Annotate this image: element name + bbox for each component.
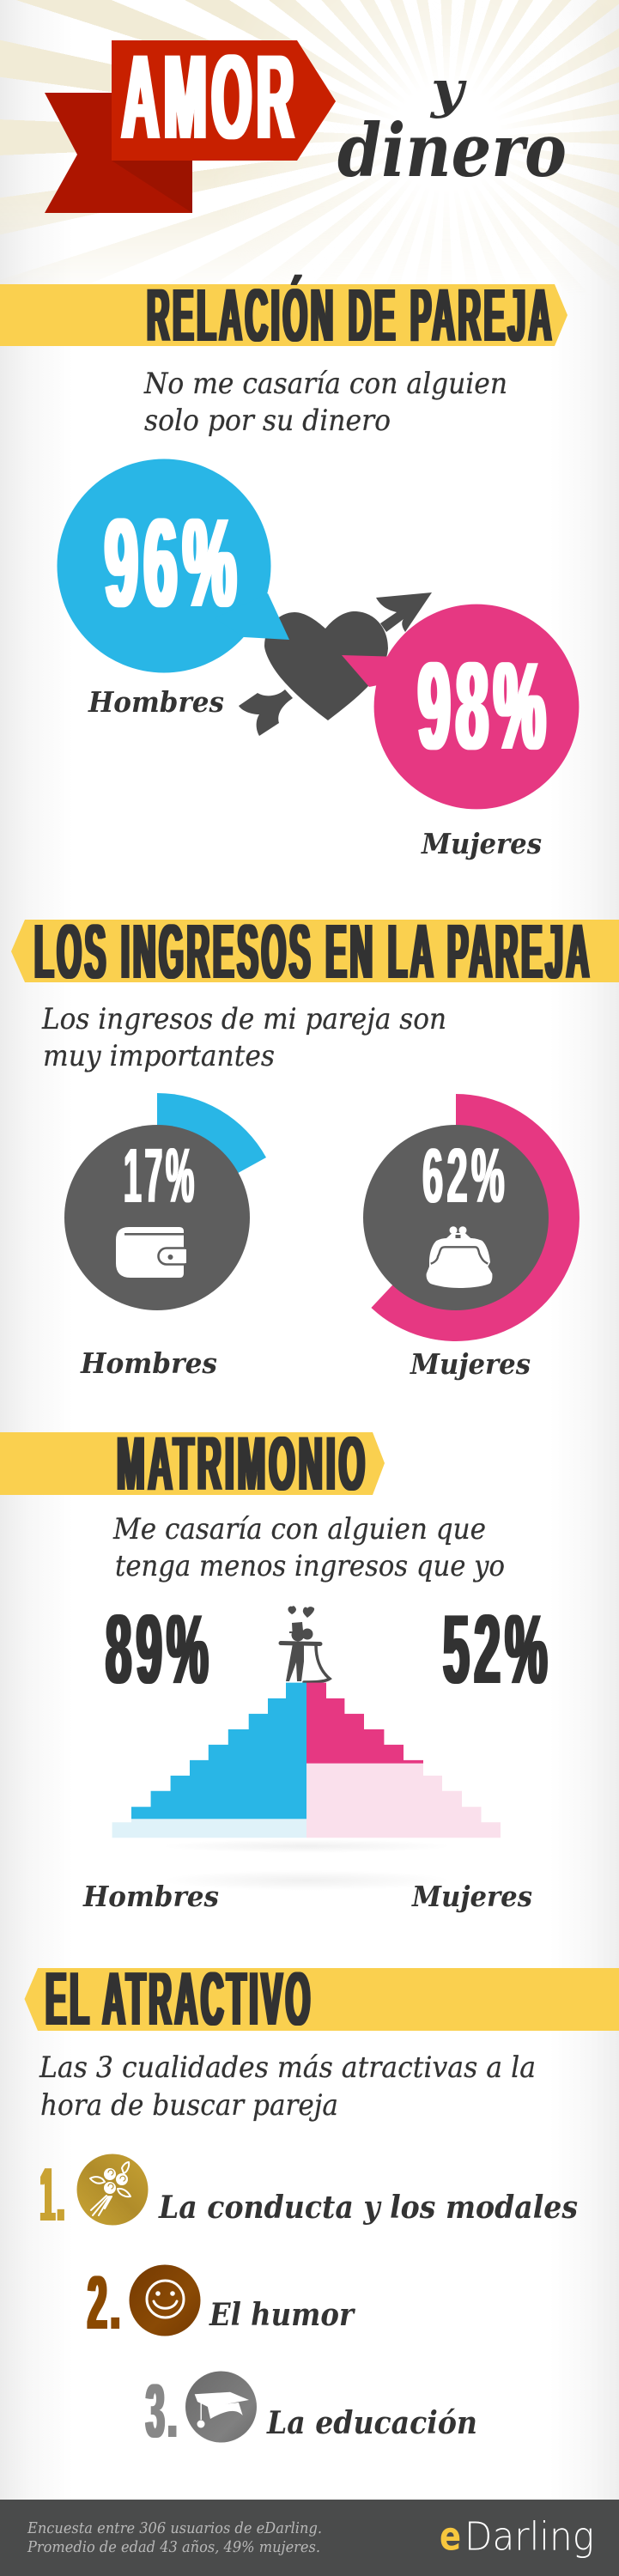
- question text: solo por su dinero: [144, 404, 391, 438]
- icon: purse: [427, 1226, 492, 1288]
- item 2: 2.: [88, 2260, 124, 2345]
- question text: hora de buscar pareja: [40, 2088, 338, 2123]
- icon: bouquet: [90, 2162, 130, 2215]
- men bubble: [57, 459, 289, 673]
- women bubble: [342, 605, 579, 809]
- panel: los ingresos en la pareja: [11, 909, 619, 1381]
- label mujeres: Mujeres: [421, 827, 542, 860]
- banner: [0, 284, 567, 346]
- soft pyramid shadow lower: [161, 1870, 452, 1891]
- icon: wedding couple: [281, 1606, 330, 1682]
- pyramid chart: [112, 1683, 501, 1891]
- question text: [143, 367, 507, 438]
- ribbon back: [45, 93, 192, 213]
- item 3: La educación: [266, 2405, 477, 2441]
- title block: [45, 29, 567, 213]
- title word y: y: [429, 60, 467, 119]
- question text: No me casaría con alguien: [143, 367, 507, 401]
- banner: [0, 1432, 385, 1495]
- question text: Me casaría con alguien que: [112, 1512, 486, 1546]
- survey note: Encuesta entre 306 usuarios de eDarling.: [27, 2519, 322, 2537]
- footer bar: [0, 2500, 619, 2576]
- banner: [11, 920, 619, 982]
- panel: relación de pareja: [0, 274, 579, 860]
- panel: matrimonio: [0, 1420, 552, 1913]
- banner: [24, 1968, 619, 2031]
- men donut 17%: 17%: [124, 1133, 197, 1219]
- item 1: 1.: [40, 2152, 67, 2237]
- label mujeres: Mujeres: [410, 1347, 531, 1381]
- survey note: [27, 2519, 322, 2556]
- logo edarling: Darling: [464, 2514, 594, 2559]
- item 3: [146, 2368, 477, 2453]
- panel: el atractivo: [24, 1956, 619, 2453]
- men base: [112, 1819, 306, 1838]
- question text: muy importantes: [43, 1039, 275, 1073]
- men bubble: 96%: [105, 493, 242, 634]
- question text: [41, 1002, 446, 1073]
- title word dinero: dinero: [337, 108, 567, 194]
- label hombres: Hombres: [82, 1880, 219, 1913]
- men steps: [131, 1683, 306, 1819]
- icon: heart with arrow: [239, 592, 432, 736]
- icon: wallet: [116, 1227, 186, 1278]
- women donut 62%: 62%: [422, 1133, 508, 1219]
- question text: [39, 2050, 536, 2123]
- label hombres: Hombres: [80, 1346, 217, 1380]
- label hombres: Hombres: [88, 685, 224, 719]
- question text: Los ingresos de mi pareja son: [41, 1002, 446, 1036]
- icon: smiley: [147, 2281, 184, 2318]
- item 2: El humor: [209, 2297, 356, 2333]
- label mujeres: Mujeres: [411, 1880, 532, 1913]
- men donut 17%: [64, 1093, 266, 1310]
- ribbon front: [112, 40, 336, 161]
- survey note: Promedio de edad 43 años, 49% mujeres.: [27, 2538, 320, 2556]
- women base: [306, 1764, 501, 1838]
- item 1: La conducta y los modales: [158, 2190, 578, 2226]
- question text: [112, 1512, 505, 1583]
- women steps: [306, 1683, 423, 1764]
- item 3: 3.: [146, 2368, 180, 2453]
- item 1: [40, 2152, 578, 2237]
- question text: Las 3 cualidades más atractivas a la: [39, 2050, 536, 2085]
- panel: matrimonio: 89%: [106, 1595, 213, 1704]
- logo edarling: e: [440, 2514, 461, 2559]
- soft pyramid shadow: [161, 1839, 452, 1853]
- women donut 62%: [363, 1094, 580, 1341]
- title block: AMOR: [122, 29, 299, 164]
- question text: tenga menos ingresos que yo: [115, 1549, 505, 1583]
- ribbon fold: [112, 161, 192, 213]
- icon: graduation cap: [195, 2392, 249, 2428]
- item 2: [88, 2260, 356, 2345]
- footer: [0, 2500, 619, 2576]
